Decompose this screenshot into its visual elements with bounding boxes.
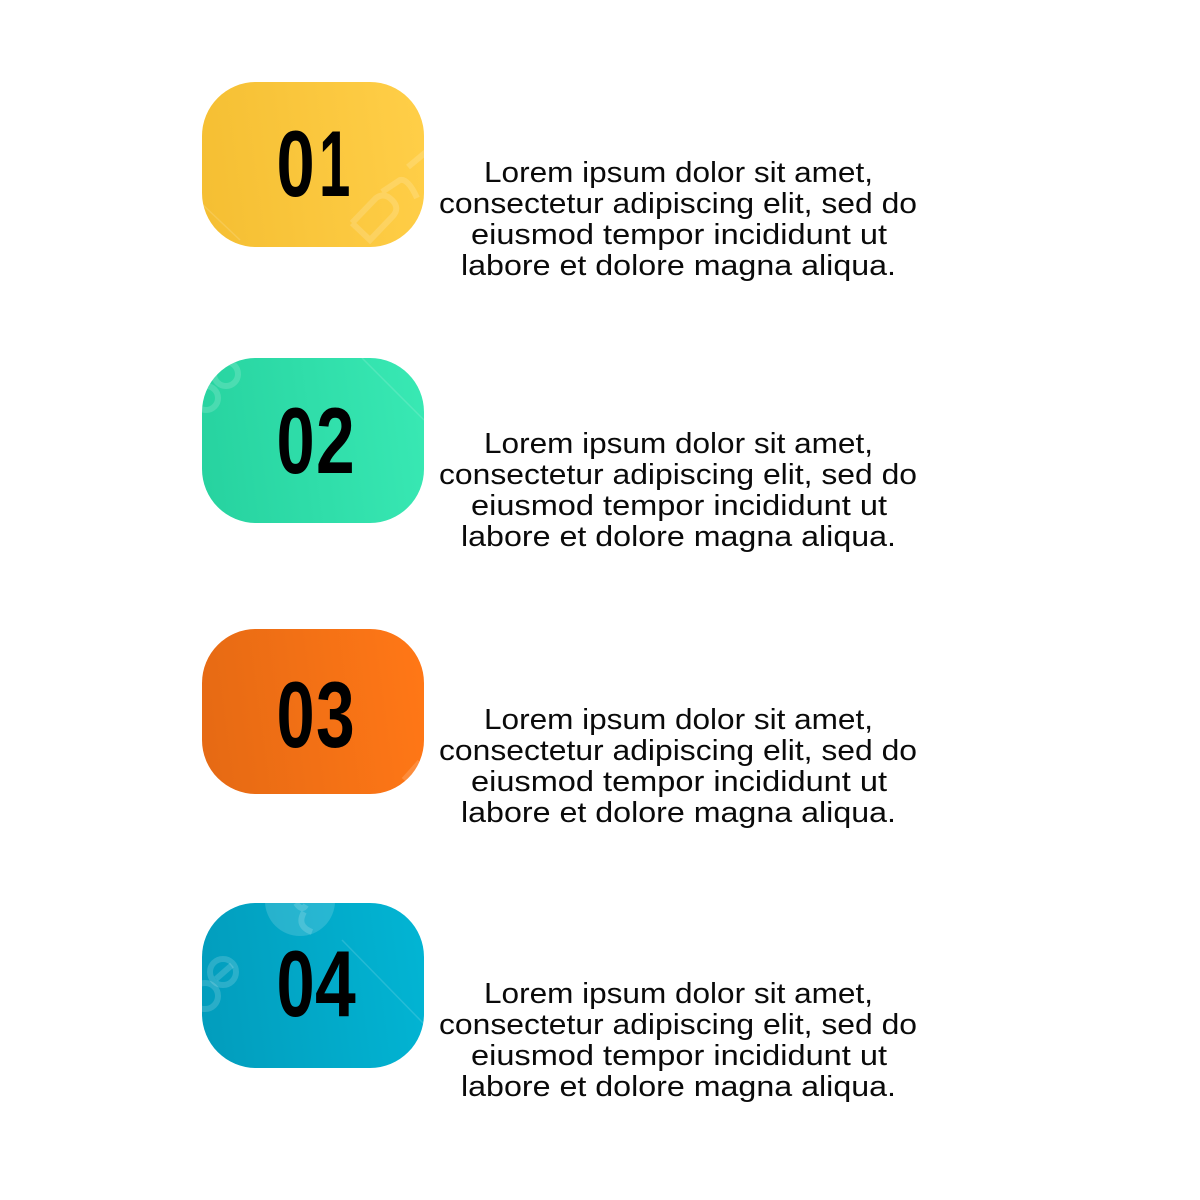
badge 01: 1	[319, 112, 350, 217]
text block 3: consectetur adipiscing elit, sed do	[439, 735, 917, 767]
text block 1	[439, 157, 917, 282]
text block 2	[439, 428, 917, 553]
text block 4: consectetur adipiscing elit, sed do	[439, 1009, 917, 1041]
badge 03: 0	[276, 664, 315, 768]
text block 3: Lorem ipsum dolor sit amet,	[484, 704, 873, 736]
text block 1: labore et dolore magna aliqua.	[461, 250, 896, 282]
item 2	[194, 358, 917, 553]
text block 2: consectetur adipiscing elit, sed do	[439, 459, 917, 491]
text block 3	[439, 704, 917, 829]
badge 04: 4	[315, 931, 356, 1036]
text block 3: eiusmod tempor incididunt ut	[471, 766, 887, 798]
badge 02	[194, 358, 424, 523]
text block 4	[439, 978, 917, 1103]
text block 2: eiusmod tempor incididunt ut	[471, 490, 887, 522]
text block 1: eiusmod tempor incididunt ut	[471, 219, 887, 251]
badge 02: 2	[316, 388, 355, 493]
text block 4: eiusmod tempor incididunt ut	[471, 1040, 887, 1072]
text block 1: Lorem ipsum dolor sit amet,	[484, 157, 873, 189]
text block 4: Lorem ipsum dolor sit amet,	[484, 978, 873, 1010]
item 3	[202, 629, 917, 829]
badge 02: 0	[276, 390, 315, 494]
text block 1: consectetur adipiscing elit, sed do	[439, 188, 917, 220]
text block 4: labore et dolore magna aliqua.	[461, 1071, 896, 1103]
item 4	[202, 903, 916, 1102]
badge 04	[202, 903, 424, 1068]
text block 3: labore et dolore magna aliqua.	[461, 797, 896, 829]
text block 2: Lorem ipsum dolor sit amet,	[484, 428, 873, 460]
badge 04: 0	[276, 933, 315, 1037]
badge 03: 3	[316, 662, 355, 767]
badge 01	[202, 82, 426, 247]
badge 01: 0	[276, 113, 315, 217]
badge 03	[202, 629, 424, 794]
item 1	[202, 82, 917, 282]
text block 2: labore et dolore magna aliqua.	[461, 521, 896, 553]
